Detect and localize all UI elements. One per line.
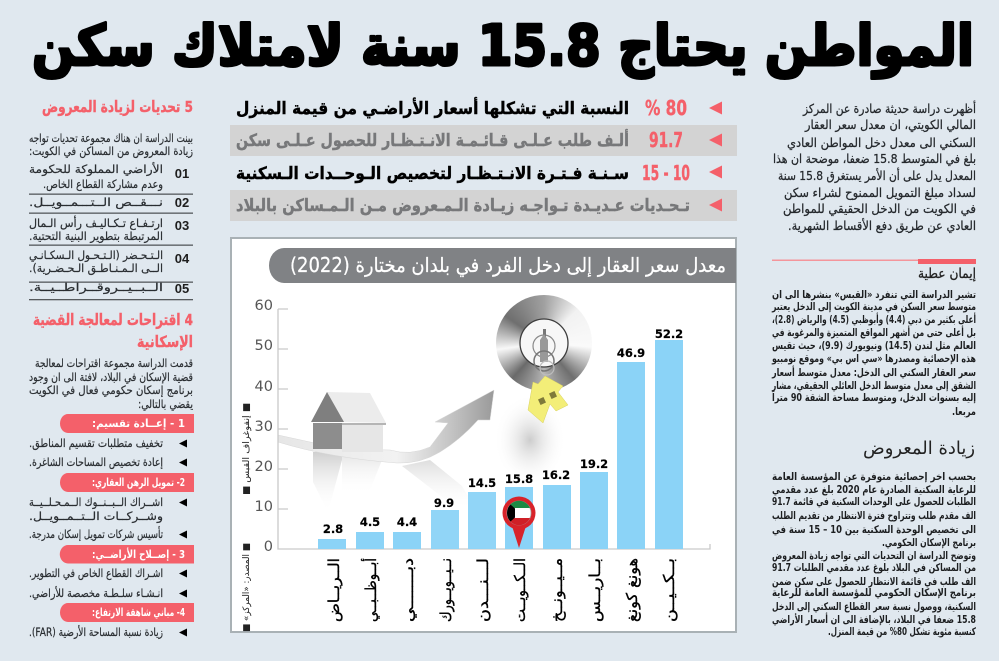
proposal bullets: زيادة نسبة المساحة الأرضية (FAR). <box>29 625 163 640</box>
figures: 80 % <box>645 96 687 120</box>
figure descriptions: سـنـة فـتـرة الانـتـظـار لتخصيص الـوحــدات الـسكنية <box>236 164 629 184</box>
axis: 0 <box>264 539 273 555</box>
text block: challenges intro <box>29 131 193 159</box>
axis: 40 <box>255 379 273 395</box>
figure descriptions <box>236 97 690 216</box>
text block: proposals intro: قدمت الدراسة مجموعة اقتراحات لمعالجة <box>35 356 193 371</box>
key fob <box>528 376 568 423</box>
lock <box>496 295 592 391</box>
text block: intro paragraph: العادي عن طريق دفع الأقساط الشهرية. <box>788 218 976 234</box>
text block: proposals intro: برنامج إسكان حكومي فعال في الكويت <box>29 383 193 398</box>
author name: إيمان عطية <box>918 266 976 282</box>
city labels: بــاريــس <box>586 558 604 622</box>
proposal pills: 1 - إعــادة تقسيم: <box>92 417 185 430</box>
bar values: 2.8 <box>323 522 343 536</box>
bar values: 52.2 <box>655 327 683 341</box>
arrows <box>709 102 722 212</box>
proposal bullets: اشـراك القطاع الخاص في التطوير. <box>29 566 163 581</box>
proposal bullets: تأسيس شركات تمويل إسكان مدرجة. <box>29 526 163 542</box>
challenge list: ارتـفـاع تـكـاليـف رأس الـمال <box>29 215 163 231</box>
panel: chart <box>231 238 736 632</box>
text block: intro paragraph: لسداد مبلغ التمويل الممنوح لشراء سكن <box>784 185 976 201</box>
text block: intro paragraph: أظهرت دراسة حديثة صادرة عن المركز <box>802 100 976 117</box>
challenge list: الأراضي المملوكة للحكومة <box>29 162 163 177</box>
bar values: 4.5 <box>360 515 380 529</box>
bar values: 46.9 <box>617 346 645 360</box>
proposal pills <box>60 414 194 622</box>
figure descriptions: تـحـديات عـديـدة تـواجـه زيـادة الـمـعروض مـن الـمـساكن بالبلاد <box>236 196 690 216</box>
heading: increasing supply: زيادة المعروض <box>863 438 975 459</box>
title: المواطن يحتاج 15.8 سنة لامتلاك سكن <box>32 14 974 79</box>
text block: intro paragraph <box>773 100 976 234</box>
challenge list: 04 <box>175 251 190 266</box>
bars <box>318 340 683 549</box>
bar values: 15.8 <box>505 472 533 486</box>
chart header <box>269 248 736 283</box>
proposal pills: 4- مباني شاهقة الارتفاع: <box>92 606 185 619</box>
axis: 30 <box>255 419 273 435</box>
proposal bullets: وشــركــات الــتــمــويــل. <box>29 509 163 524</box>
proposal pills: 2- تمويل الرهن العقاري: <box>92 476 185 489</box>
text block: study paragraph: مربعا. <box>952 406 976 418</box>
illustration: house, arrow and key <box>278 295 592 512</box>
city labels: الــكــويــت <box>511 558 529 622</box>
panel: key figures <box>230 96 737 221</box>
proposal bullets: اشــراك الــبــنــوك الــمـحـلــيــة <box>29 495 163 510</box>
heading: four proposals <box>33 311 193 351</box>
side credit: ■ المصدر: «المركز» ■ <box>242 543 252 632</box>
axis: 10 <box>255 499 273 515</box>
axis <box>255 298 710 555</box>
text block: challenges intro: بينت الدراسة ان هناك مجموعة تحديات تواجه <box>29 131 193 146</box>
panel: four proposals <box>29 311 194 640</box>
axis: 60 <box>255 298 273 314</box>
axis: 50 <box>255 338 273 354</box>
city labels <box>325 558 678 622</box>
challenge list: المرتبطة بتطوير البنية التحتية. <box>29 229 163 244</box>
text block: proposals intro: قضية الإسكان في البلاد، لافتة الى ان وجود <box>29 370 193 385</box>
heading: five challenges: 5 تحديات لزيادة المعروض <box>42 98 193 116</box>
challenge list: الــبــيــروقــراطــيــة. <box>29 280 163 295</box>
proposal bullets: انـشـاء سلـطـة مخصصة للأراضي. <box>29 586 163 601</box>
bar values: 14.5 <box>468 476 496 490</box>
axis: 20 <box>255 459 273 475</box>
text block: study paragraph <box>771 289 976 418</box>
bar values: 4.4 <box>397 515 417 529</box>
icon: Kuwait map pin <box>502 496 536 548</box>
bar values: 9.9 <box>434 496 454 510</box>
city labels: هونغ كونغ <box>623 558 641 622</box>
challenge list: 02 <box>175 195 189 210</box>
challenge list: نـــقــص الــتـــمــويــل. <box>29 195 163 210</box>
figure descriptions: ألـف طلب عـلـى قـائـمـة الانـتـظـار للحصول عـلـى سكن <box>236 129 629 151</box>
challenge list: الـتـحـضر (الـتـحـول الـسكـانـي <box>29 248 163 263</box>
panel: five challenges <box>29 98 193 300</box>
challenge list <box>29 162 193 300</box>
text block: challenges intro: زيادة المعروض من المساكن في الكويت: <box>29 144 193 159</box>
figures: 91.7 <box>649 128 683 152</box>
city labels: أبــوظــبــي <box>361 558 381 622</box>
city labels: دبـــــــي <box>399 558 418 622</box>
city labels: مــيــونــخ <box>548 558 566 622</box>
text block: intro paragraph: المالي الكويتي، ان معدل سعر العقار <box>804 117 976 133</box>
text block: intro paragraph: في الكويت من الدخل الحقيقي للمواطن <box>783 201 976 217</box>
text block: supply paragraphs <box>772 471 977 638</box>
challenge list: وعدم مشاركة القطاع الخاص. <box>43 177 163 192</box>
panel: intro column <box>771 100 977 638</box>
figures: 15 - 10 <box>642 161 690 185</box>
text block: intro paragraph: بلغ في المتوسط 15.8 ضعفا، موضحة ان هذا <box>773 151 976 167</box>
text block: study paragraph: العالم مثل لندن (14.5) ونيويورك (9.9)، حيث تقيس <box>772 340 976 352</box>
side credit <box>242 403 252 632</box>
text block: intro paragraph: المعدل يدل على أن الأمر يستغرق 15.8 سنة <box>778 167 976 184</box>
side credit: ■ إنفوغراف القبس ■ <box>242 403 252 495</box>
text block: intro paragraph: السكني الى معدل دخل المواطن العادي <box>787 135 976 151</box>
figure descriptions: النسبة التي تشكلها أسعار الأراضـي من قيمة المنزل <box>236 97 629 119</box>
challenge list: الــى الـمـنـاطـق الـحـضـرية). <box>29 261 163 276</box>
heading: four proposals: 4 اقتراحات لمعالجة القضية <box>33 311 193 329</box>
proposal bullets: إعادة تخصيص المساحات الشاغرة. <box>29 455 163 470</box>
city labels: نــيــويــورك <box>437 558 455 622</box>
challenge list: 03 <box>175 218 189 233</box>
bar values: 19.2 <box>580 457 608 471</box>
challenge list: 05 <box>175 281 189 296</box>
city labels: الــريــاض <box>325 558 343 622</box>
city labels: لـــنـــدن <box>474 558 492 622</box>
proposal pills: 3 - إصــلاح الأراضــي: <box>92 547 185 561</box>
proposal bullets: تخفيف متطلبات تقسيم المناطق. <box>29 436 163 451</box>
city labels: بــكــيــن <box>660 558 678 622</box>
text block: proposals intro: يقضي بالتالي: <box>138 397 193 411</box>
bar values: 16.2 <box>542 468 570 482</box>
chart header: معدل سعر العقار إلى دخل الفرد في بلدان مختارة (2022) <box>290 253 726 278</box>
proposal bullets <box>29 436 187 640</box>
bar values <box>323 327 683 536</box>
heading: four proposals: الإسكانية <box>137 333 193 351</box>
text block: proposals intro <box>29 356 193 411</box>
figures <box>642 96 690 185</box>
challenge list: 01 <box>175 166 189 181</box>
